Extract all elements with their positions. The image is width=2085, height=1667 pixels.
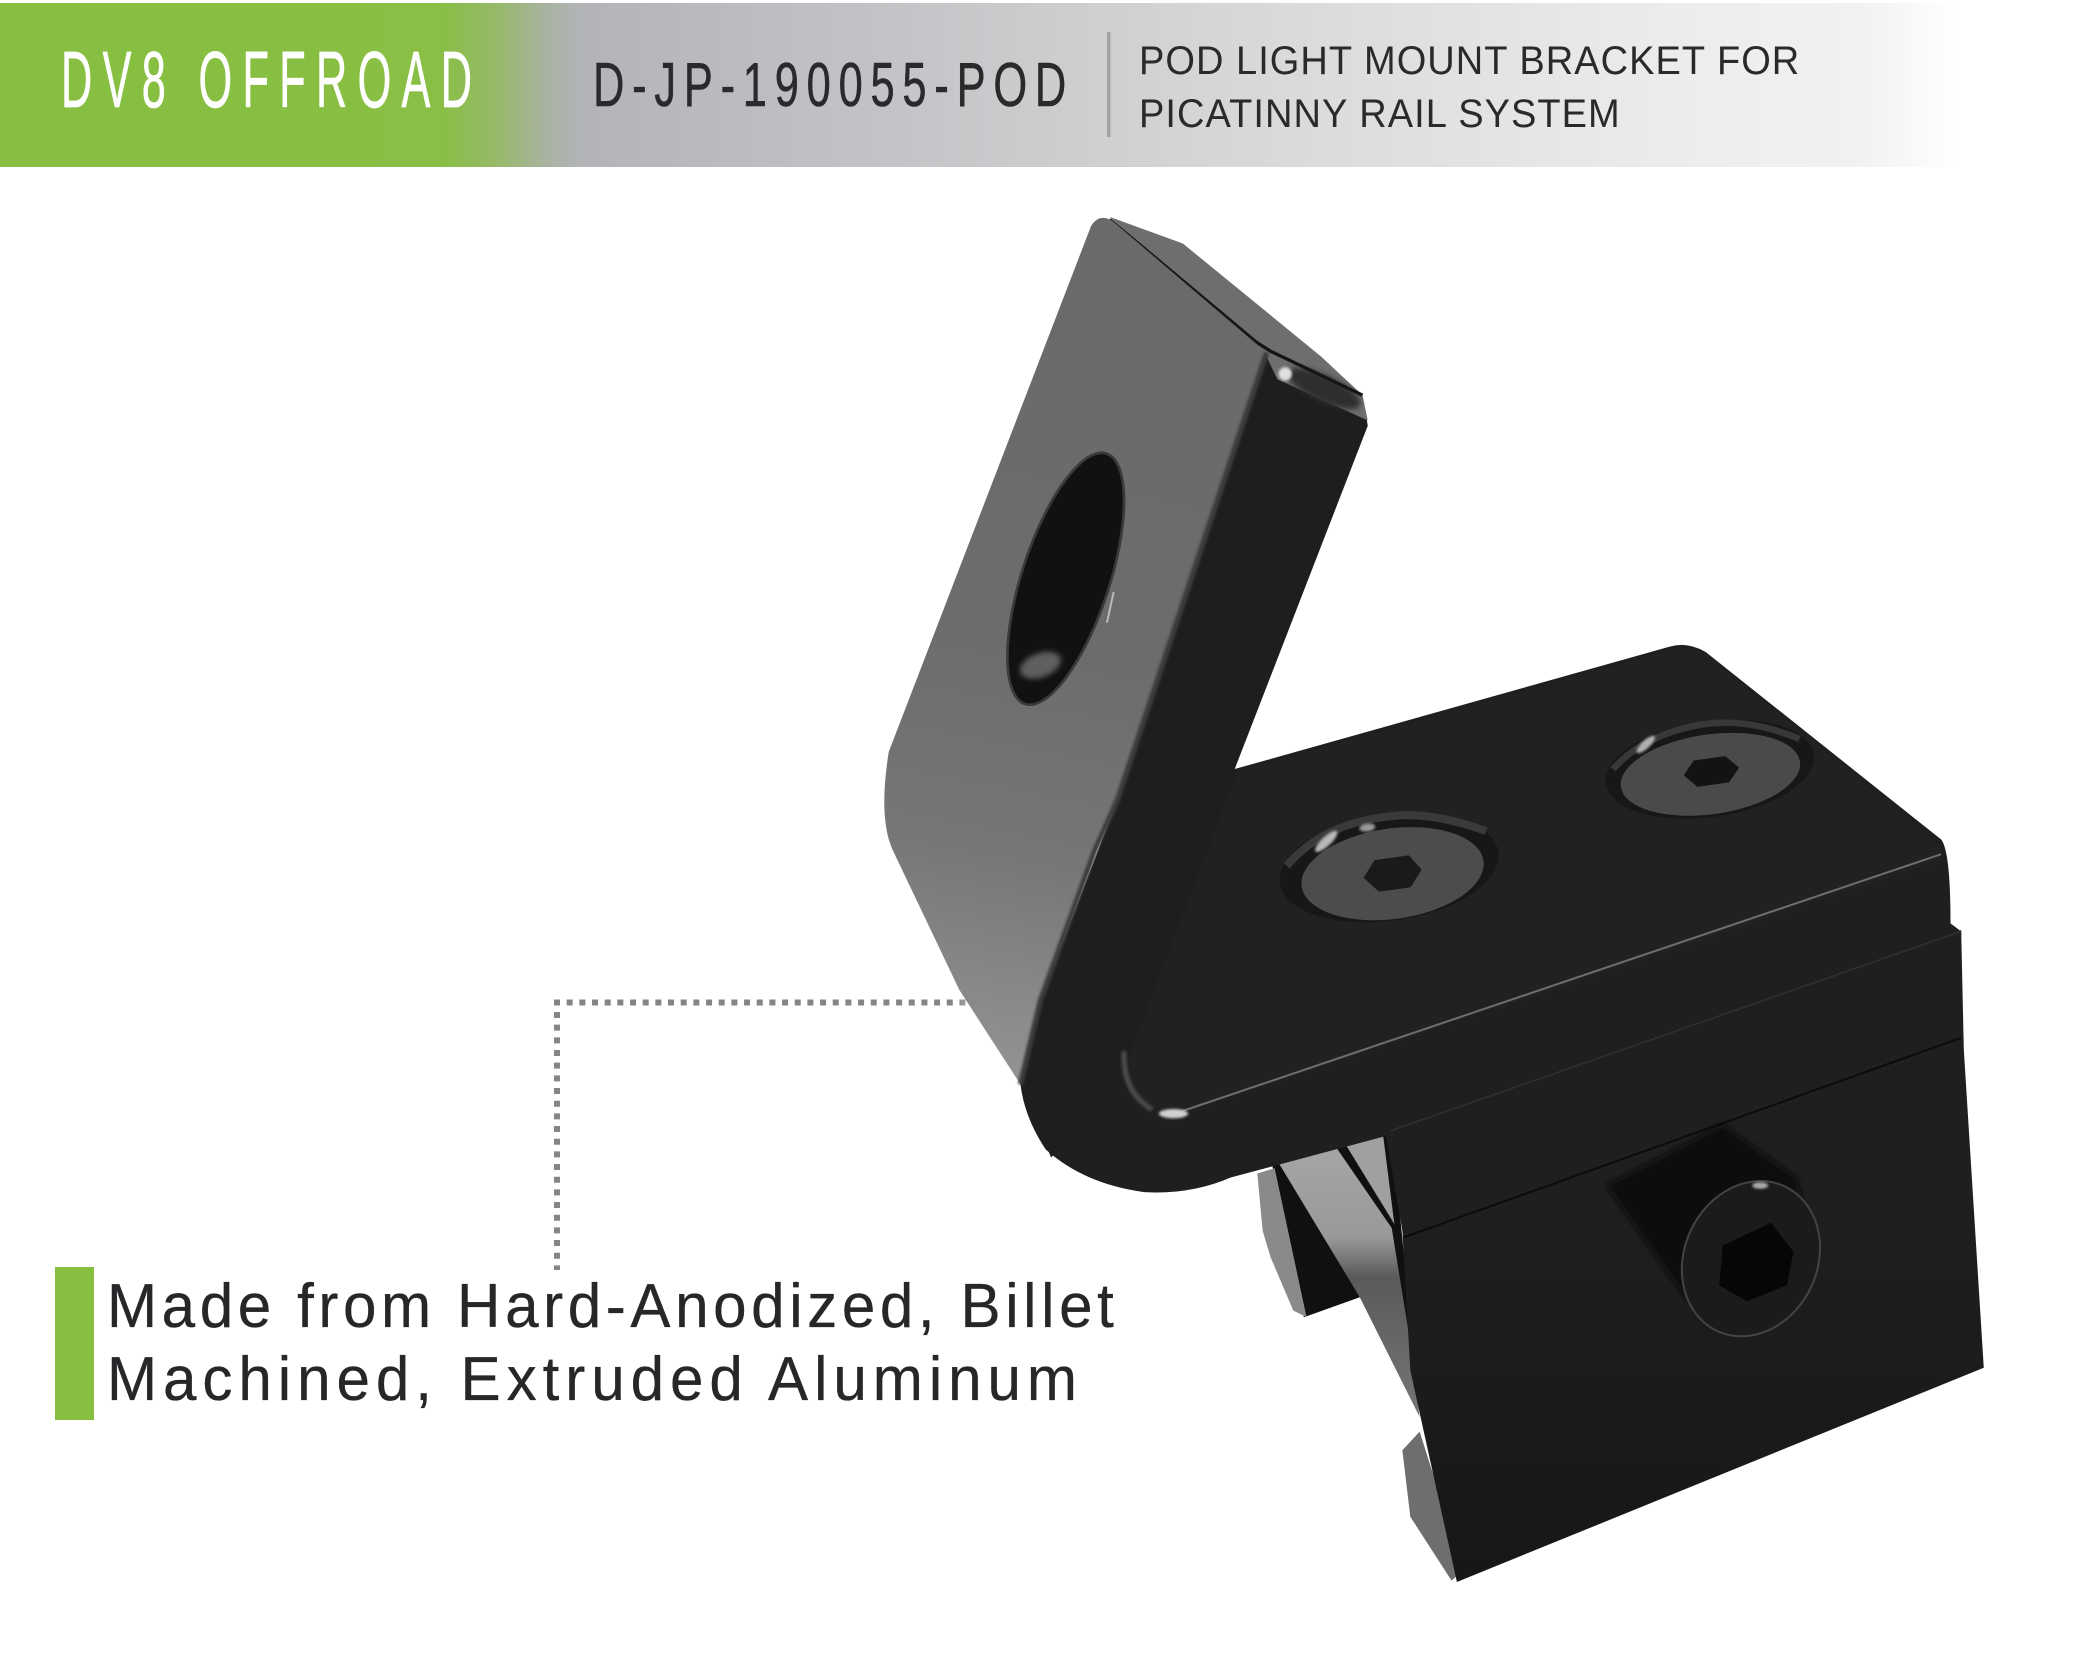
side screw boss shadow bbox=[1606, 1124, 1813, 1300]
plate corner crescent bbox=[1124, 1051, 1152, 1110]
rail pieces under bracket bbox=[1257, 1120, 1464, 1581]
upper plate black side bbox=[1020, 339, 1368, 1158]
side screw head bbox=[1657, 1158, 1845, 1359]
rim shadow on corner bbox=[1282, 360, 1366, 417]
plate screw left bbox=[1272, 799, 1506, 936]
front seam bbox=[1390, 931, 1961, 1131]
upper plate top rim bbox=[1110, 217, 1368, 420]
product title: POD LIGHT MOUNT BRACKET FOR bbox=[1139, 39, 1799, 83]
block seam bbox=[1404, 1038, 1961, 1237]
callout text: Machined, Extruded Aluminum bbox=[107, 1344, 1077, 1413]
plate corner highlight bbox=[1159, 1109, 1188, 1118]
side screw hex socket bbox=[1719, 1223, 1794, 1301]
brand name: DV8 OFFROAD bbox=[61, 35, 472, 124]
product title: PICATINNY RAIL SYSTEM bbox=[1139, 92, 1620, 136]
product title bbox=[1139, 39, 1799, 136]
lower plate top face bbox=[1122, 648, 1942, 1115]
plate front edge highlight bbox=[1175, 854, 1941, 1114]
rail block bbox=[1385, 930, 1984, 1582]
plate screw right bbox=[1599, 707, 1820, 831]
header divider bbox=[1107, 32, 1110, 137]
upper plate rim crease bbox=[1110, 220, 1362, 395]
header banner bbox=[0, 3, 2085, 167]
part number: D-JP-190055-POD bbox=[593, 52, 1066, 120]
upper plate gray face bbox=[884, 218, 1267, 1084]
callout text: Made from Hard-Anodized, Billet bbox=[107, 1271, 1114, 1340]
callout green bar bbox=[55, 1267, 94, 1420]
mounting hole bbox=[983, 440, 1148, 718]
bent bracket lower plate base bbox=[1020, 645, 1961, 1192]
face edge soft shading bbox=[1020, 353, 1267, 1084]
side screw highlight bbox=[1752, 1182, 1768, 1189]
callout leader line bbox=[554, 1002, 1000, 1270]
upper plate highlight bbox=[1279, 367, 1292, 381]
callout text bbox=[107, 1271, 1114, 1413]
product photo: bracket bbox=[884, 217, 1984, 1582]
callout: material bbox=[55, 1267, 1114, 1420]
header gradient bar bbox=[0, 3, 2085, 167]
